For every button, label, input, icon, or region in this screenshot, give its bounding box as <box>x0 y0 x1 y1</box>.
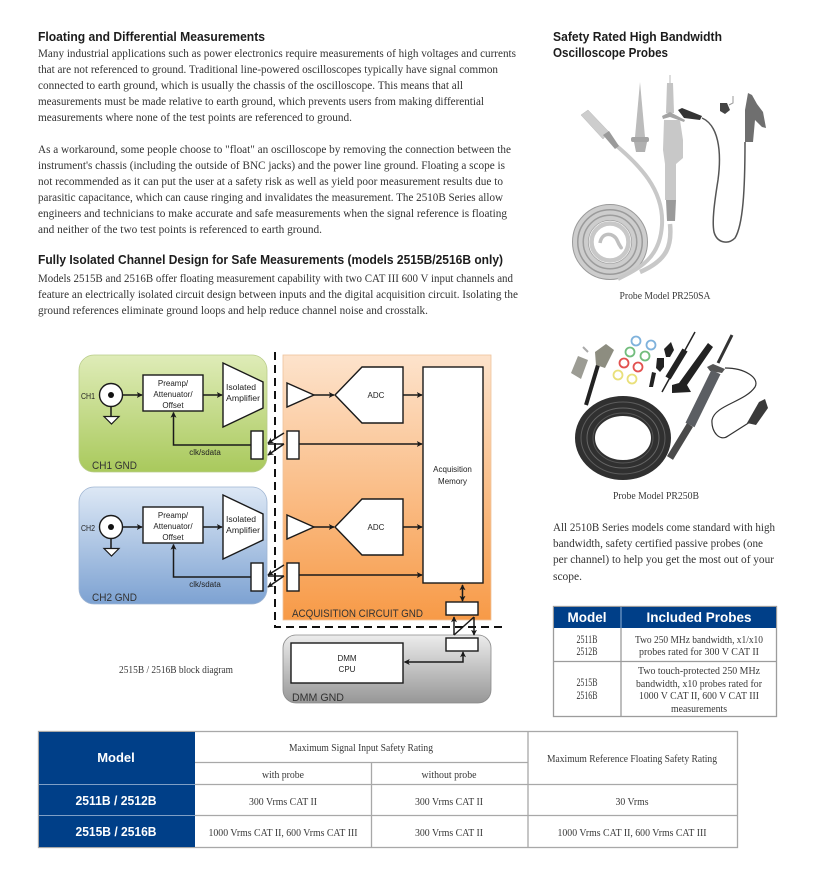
preamp box CH2: Offset <box>162 533 184 542</box>
input amplifier and ADC channel 2 <box>287 499 422 555</box>
panel: CH1 GND: clk/sdata <box>189 448 221 457</box>
caption: block diagram: 2515B / 2516B block diagram <box>119 665 233 676</box>
row: 2511B / 2512B ratings <box>249 797 648 808</box>
preamp box CH1: Attenuator/ <box>153 390 193 399</box>
model column: 2515B / 2516B <box>76 825 156 839</box>
paragraph: industrial applications: connected to earth ground, which is usually the chassis of the oscilloscope. This means that all <box>38 78 464 92</box>
model column <box>39 732 195 847</box>
arrows: isolation crossing CH1 <box>268 433 284 455</box>
panel: CH1 GND: CH1 <box>81 392 95 401</box>
row: 2515B / 2516B ratings <box>208 828 707 839</box>
isolated amplifier CH2: Isolated <box>226 515 256 524</box>
panel: CH2 GND: CH2 GND <box>92 592 137 604</box>
isolated amplifier CH1: Isolated <box>226 383 256 392</box>
caption: probe PR250B: Probe Model PR250B <box>613 491 699 502</box>
row: 2515B / 2516B ratings: 1000 Vrms CAT II, 600 Vrms CAT III <box>208 828 358 839</box>
row: 2515B 2516B: measurements <box>671 704 727 715</box>
heading: safety rated probes: Oscilloscope Probes <box>553 45 668 60</box>
table header <box>554 607 776 628</box>
heading: safety rated probes: Safety Rated High Bandwidth <box>553 29 722 44</box>
black accessories <box>649 332 713 393</box>
heading: safety rated probes <box>553 29 722 60</box>
row: 2511B 2512B: 2512B <box>576 646 598 658</box>
panel: acquisition circuit GND: ACQUISITION CIRCUIT GND <box>292 608 423 620</box>
illustration: probe PR250B <box>571 332 768 474</box>
coloured identification rings <box>614 336 656 384</box>
panel: acquisition circuit GND <box>283 355 491 620</box>
preamp box CH1: Offset <box>162 401 184 410</box>
coiled black cable <box>581 402 665 474</box>
paragraph: industrial applications <box>38 46 516 124</box>
panel: CH2 GND <box>79 487 267 604</box>
paragraph: floating workaround: instrument's chassis (including the outside of BNC jacks) and the power line ground. Floating a scope is <box>38 158 505 172</box>
paragraph: series probes: per channel) to help you get the most out of your <box>553 552 774 566</box>
row: 2511B / 2512B ratings: 300 Vrms CAT II <box>249 797 317 808</box>
paragraph: industrial applications: measurements where none of the test points are referenced to ground. <box>38 110 352 124</box>
illustration: probe PR250SA <box>575 75 766 279</box>
table header: Model <box>568 610 606 625</box>
caption: probe PR250SA: Probe Model PR250SA <box>620 291 711 302</box>
paragraph: series probes <box>553 520 775 583</box>
paragraph: industrial applications: Many industrial applications such as power electronics require measurements of high voltages and currents <box>38 46 516 60</box>
isolated amplifier CH1 <box>223 363 263 427</box>
row: 2515B 2516B: bandwidth, x10 probes rated for <box>636 679 762 690</box>
row: 2511B / 2512B ratings: 30 Vrms <box>616 797 648 808</box>
preamp box CH1 <box>143 375 203 411</box>
acquisition memory <box>423 367 483 583</box>
column headers: Maximum Signal Input Safety Rating <box>289 743 434 754</box>
ground lead and clip <box>712 368 768 438</box>
paragraph: industrial applications: measurements must be made relative to earth ground, which prevents users from making differential <box>38 94 485 108</box>
preamp box CH2: Attenuator/ <box>153 522 193 531</box>
acquisition memory: Acquisition <box>433 465 472 474</box>
row: 2515B / 2516B ratings: 300 Vrms CAT II <box>415 828 483 839</box>
paragraph: floating workaround: and neither of the two test points is referenced to earth ground. <box>38 222 322 236</box>
section: floating and differential measurements <box>38 29 516 236</box>
column headers: with probe <box>262 770 304 781</box>
table: safety ratings <box>38 732 738 848</box>
coiled cable <box>575 207 645 277</box>
paragraph: series probes: scope. <box>553 569 582 583</box>
paragraph: series probes: All 2510B Series models come standard with high <box>553 520 775 534</box>
model column: Model <box>97 750 135 765</box>
row: 2515B 2516B: 2515B <box>576 677 598 689</box>
model column: 2511B / 2512B <box>76 794 156 808</box>
paragraph: floating workaround: not recommended as it can put the user at a safety risk as well as yield poor measurement results due to <box>38 174 503 188</box>
row: 2515B 2516B: Two touch-protected 250 MHz <box>638 666 760 677</box>
ground lead with alligator clip <box>678 93 766 242</box>
row: 2515B 2516B <box>576 666 762 715</box>
section: fully isolated channel design <box>38 252 518 317</box>
BNC connector and cable <box>581 110 662 279</box>
BNC connector and strain relief <box>571 344 614 405</box>
panel: DMM GND: DMM GND <box>292 692 344 704</box>
DMM CPU <box>291 643 403 683</box>
input amplifier and ADC channel 1 <box>287 367 422 423</box>
row: 2515B 2516B: 1000 V CAT II, 600 V CAT III <box>639 691 759 702</box>
panel: CH1 GND <box>79 355 267 472</box>
arrows: isolation crossing CH2 <box>268 565 284 587</box>
row: 2511B 2512B <box>576 634 763 658</box>
insulating cap <box>631 82 649 152</box>
acquisition memory: Memory <box>438 477 467 486</box>
isolated amplifier CH2 <box>223 495 263 559</box>
isolation barrier dashed line <box>275 352 502 627</box>
paragraph: floating workaround: As a workaround, some people choose to "float" an oscilloscope by removing the connection between the <box>38 142 511 156</box>
DMM CPU: DMM <box>337 654 357 663</box>
block diagram <box>79 352 502 704</box>
panel: CH2 GND: CH2 <box>81 524 95 533</box>
paragraph: floating workaround <box>38 142 511 236</box>
paragraph: isolated models: feature an electrically isolated circuit design between inputs and the digital acquisition circuit. Isolating the <box>38 287 518 301</box>
input amplifier and ADC channel 1: ADC <box>368 391 385 400</box>
isolated amplifier CH2: Amplifier <box>226 526 260 535</box>
row: 2511B 2512B: Two 250 MHz bandwidth, x1/x10 <box>635 635 763 646</box>
column headers <box>262 743 718 781</box>
paragraph: floating workaround: parasitic capacitance, which can cause ringing and invalidates the measurement. The 2510B Series allow <box>38 190 503 204</box>
arrows: isolation crossing DMM <box>454 617 474 635</box>
isolated amplifier CH1: Amplifier <box>226 394 260 403</box>
column headers: without probe <box>422 770 477 781</box>
icon: CH1 BNC input <box>100 384 122 424</box>
row: 2511B 2512B: 2511B <box>576 634 598 646</box>
probe body <box>640 75 685 272</box>
panel: CH1 GND: CH1 GND <box>92 460 137 472</box>
paragraph: isolated models: ground references eliminate ground loops and help reduce channel noise and crosstalk. <box>38 303 428 317</box>
row: 2515B 2516B: 2516B <box>576 690 598 702</box>
preamp box CH2 <box>143 507 203 543</box>
column headers: Maximum Reference Floating Safety Rating <box>547 754 718 765</box>
icon: CH2 BNC input <box>100 516 122 556</box>
table: included probes <box>553 606 777 717</box>
preamp box CH2: Preamp/ <box>158 511 189 520</box>
table header: Included Probes <box>646 610 752 625</box>
paragraph: floating workaround: engineers and technicians to make accurate and safe measurements when the signal reference is floating <box>38 206 507 220</box>
paragraph: isolated models <box>38 271 518 317</box>
paragraph: series probes: bandwidth, safety certified passive probes (one <box>553 536 763 550</box>
heading: floating and differential: Floating and Differential Measurements <box>38 29 265 44</box>
probe body <box>670 335 732 458</box>
paragraph: industrial applications: that are not referenced to ground. Traditional line-powered oscilloscopes typically have signal common <box>38 62 498 76</box>
DMM CPU: CPU <box>339 665 356 674</box>
row: 2515B / 2516B ratings: 1000 Vrms CAT II, 600 Vrms CAT III <box>558 828 707 839</box>
panel: CH2 GND: clk/sdata <box>189 580 221 589</box>
preamp box CH1: Preamp/ <box>158 379 189 388</box>
paragraph: isolated models: Models 2515B and 2516B offer floating measurement capability with two CAT III 600 V input channels and <box>38 271 513 285</box>
row: 2511B / 2512B ratings: 300 Vrms CAT II <box>415 797 483 808</box>
panel: DMM GND <box>283 635 491 704</box>
row: 2511B 2512B: probes rated for 300 V CAT II <box>639 647 759 658</box>
input amplifier and ADC channel 2: ADC <box>368 523 385 532</box>
heading: fully isolated channel design: Fully Isolated Channel Design for Safe Measurements (models 2515B/2516B only) <box>38 252 503 267</box>
